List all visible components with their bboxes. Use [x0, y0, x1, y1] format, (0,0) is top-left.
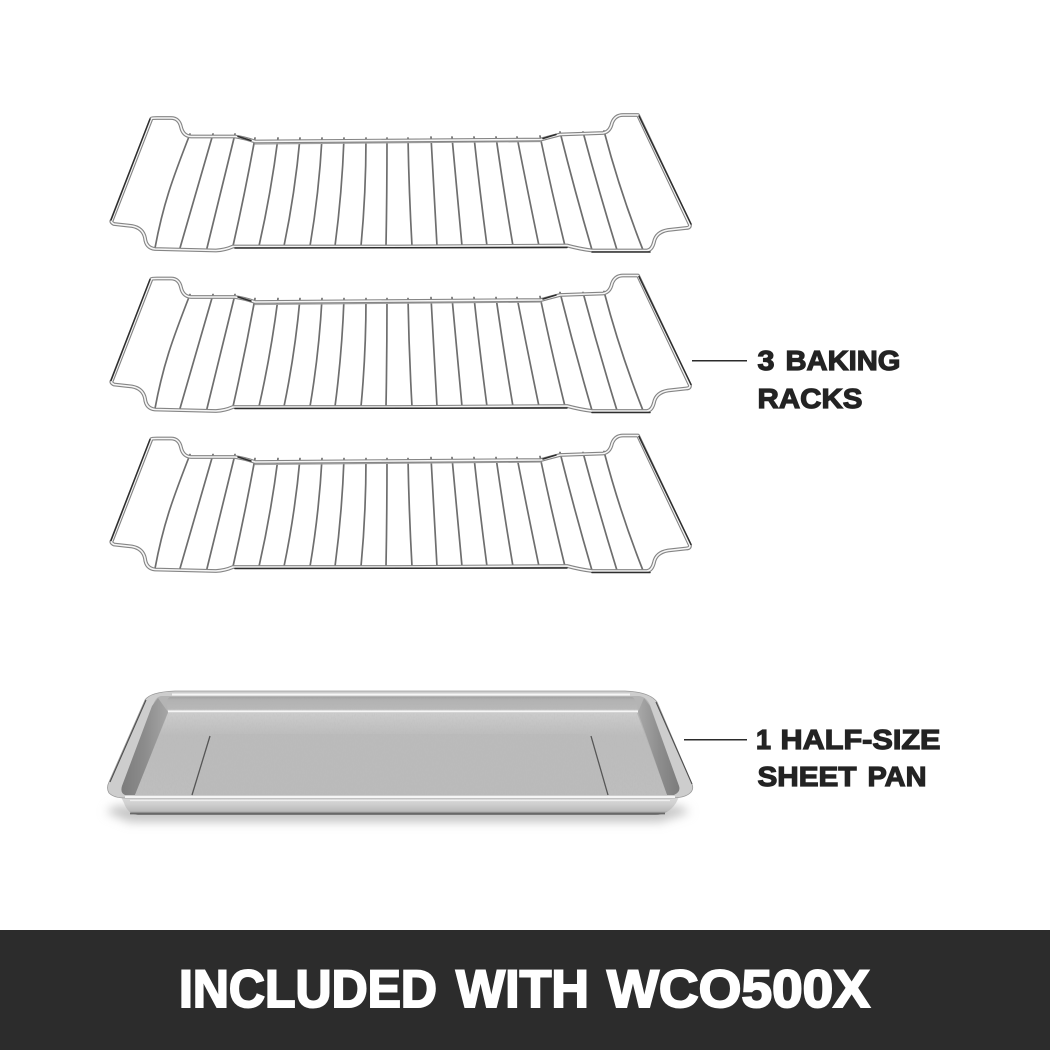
- floor: [135, 713, 667, 795]
- label: 1 half-size sheet pan: [756, 724, 940, 792]
- label: 1 half-size sheet pan: SHEET: [758, 761, 856, 792]
- label: 3 baking racks: BAKING: [786, 345, 900, 376]
- label: 3 baking racks: [758, 345, 900, 414]
- label: 3 baking racks: 3: [758, 345, 774, 376]
- leader line: sheet pan: [684, 739, 747, 740]
- footer title: WCO500X: [607, 960, 870, 1019]
- rack 1: [111, 115, 691, 252]
- sheet pan: [106, 691, 693, 822]
- pan well: [122, 696, 679, 794]
- left wall: [121, 698, 168, 795]
- pan shadow: [106, 806, 690, 822]
- leader line: baking racks: [692, 360, 747, 362]
- label: 3 baking racks: RACKS: [758, 383, 862, 414]
- label: 1 half-size sheet pan: 1: [756, 724, 771, 755]
- label: 1 half-size sheet pan: HALF-SIZE: [780, 724, 940, 755]
- footer bar: [0, 930, 1050, 1050]
- right wall: [638, 698, 679, 795]
- footer title: [179, 960, 870, 1019]
- pan front wall: [120, 795, 680, 815]
- rack 3: [111, 436, 691, 572]
- brushed texture: [135, 697, 667, 795]
- footer title: INCLUDED: [179, 960, 437, 1019]
- rack 2: [111, 276, 691, 412]
- raised panel: [192, 734, 608, 795]
- back wall: [167, 697, 638, 712]
- label: 1 half-size sheet pan: PAN: [868, 761, 926, 792]
- rim highlights: [125, 694, 675, 797]
- footer title: WITH: [456, 960, 589, 1019]
- pan rim: [108, 691, 693, 798]
